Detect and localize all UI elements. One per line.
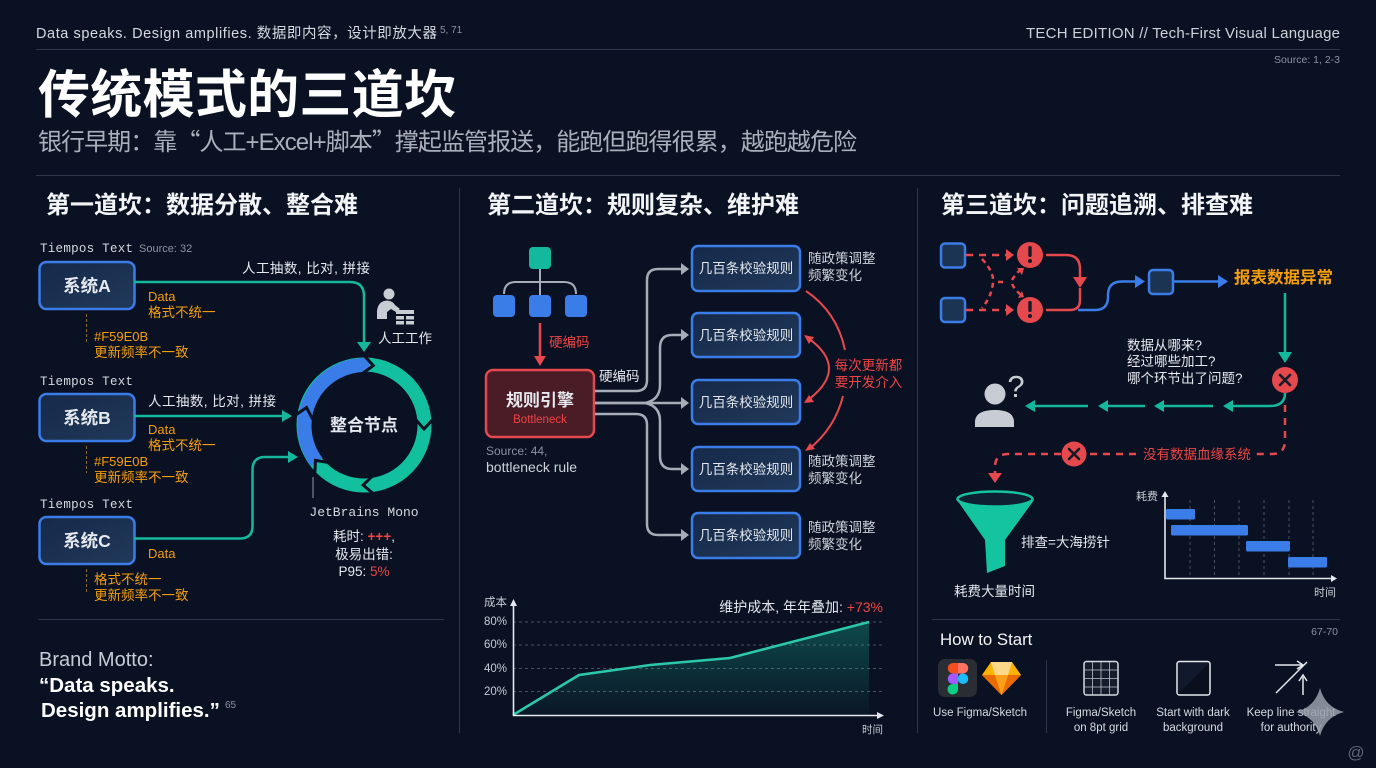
system A block: 格式不统一	[148, 305, 216, 320]
step: dark background: Start with dark	[1156, 707, 1230, 719]
heading: panel one: 第一道坎：数据分散、整合难	[46, 192, 358, 219]
rule box three: 几百条校验规则	[699, 394, 793, 410]
icon: manual work	[377, 288, 432, 346]
arrow: system B to integration node	[134, 393, 292, 422]
engine source note: Source: 44,	[486, 444, 547, 458]
system C block	[40, 498, 189, 603]
chart: maintenance cost area chart: 时间	[862, 723, 883, 736]
system B block	[40, 375, 216, 485]
rule box one	[692, 246, 876, 291]
heading: panel two: 第二道坎：规则复杂、维护难	[487, 192, 799, 219]
brand motto: “Data speaks.	[39, 674, 175, 697]
chart: time cost gantt	[1136, 490, 1337, 599]
heading: panel three: 第三道坎：问题追溯、排查难	[941, 192, 1253, 219]
rule box three	[692, 380, 800, 424]
icon: Figma	[938, 659, 977, 697]
title: 传统模式的三道坎	[38, 67, 456, 125]
chart: maintenance cost area chart: 80%	[484, 616, 507, 628]
red curved arrows: developer intervention	[804, 291, 903, 451]
step: 8pt grid	[1066, 662, 1136, 734]
rule box four: 随政策调整	[808, 453, 876, 469]
arrow: no data lineage path	[988, 405, 1285, 483]
system C block: Data	[148, 546, 176, 561]
system C block: 更新频率不一致	[94, 587, 189, 603]
system A block: Source: 32	[139, 243, 192, 255]
step: straight lines: for authority	[1261, 722, 1322, 734]
system C block: 系统C	[63, 531, 111, 551]
step: straight lines	[1247, 661, 1336, 734]
system C block: 格式不统一	[94, 572, 162, 587]
panel: how to start	[933, 626, 1338, 734]
icon: failure point	[1272, 367, 1298, 393]
panel: rule complexity	[484, 192, 903, 736]
arrow: no data lineage path: 没有数据血缘系统	[1143, 447, 1251, 462]
chart: maintenance cost area chart: 维护成本, 年年叠加: +73%	[719, 599, 883, 615]
step: 8pt grid: Figma/Sketch	[1066, 707, 1136, 719]
header strapline: Data speaks. Design amplifies. 数据即内容，设计即放大器	[36, 25, 438, 42]
header edition label	[1026, 25, 1340, 66]
chart: maintenance cost area chart	[484, 595, 884, 736]
chart: maintenance cost area chart: 成本	[484, 595, 507, 609]
chart: maintenance cost area chart: 20%	[484, 686, 507, 698]
icon: hierarchy tree	[493, 247, 587, 317]
engine source note	[486, 444, 577, 475]
connectors: engine to rules	[595, 263, 689, 541]
connectors: engine to rules: 硬编码	[599, 369, 640, 384]
rule box one: 随政策调整	[808, 250, 876, 266]
tangled data flow	[941, 242, 1228, 323]
icon: sparkle mark	[1296, 688, 1344, 736]
arrow: system A to integration node: 人工抽数, 比对, 拼接	[242, 260, 370, 276]
rule engine block: Bottleneck	[513, 414, 567, 426]
system B block: 更新频率不一致	[94, 469, 189, 485]
arrow: hard-coded into engine: 硬编码	[549, 335, 590, 350]
icon: manual work: 人工工作	[378, 331, 432, 346]
system C block: Tiempos Text	[40, 498, 133, 512]
arrow: anomaly to failure point	[1278, 293, 1292, 363]
rule box two: 几百条校验规则	[699, 327, 793, 343]
integration node ring	[295, 356, 433, 494]
icon: confused person: ?	[1007, 369, 1025, 404]
brand motto	[39, 649, 237, 722]
engine source note: bottleneck rule	[486, 459, 577, 475]
rule box one: 频繁变化	[808, 268, 862, 283]
brand motto: 65	[225, 700, 237, 711]
integration node cost note: JetBrains Mono	[309, 505, 419, 520]
icon: confused person	[975, 369, 1025, 427]
rule engine block	[486, 370, 594, 437]
questions text: 数据从哪来?	[1127, 338, 1202, 353]
integration node cost note	[309, 477, 419, 579]
step: 8pt grid: on 8pt grid	[1074, 722, 1128, 734]
reference number: 67-70	[1311, 626, 1338, 638]
questions text	[1127, 338, 1243, 386]
icon: Sketch	[982, 662, 1021, 695]
rule box five: 频繁变化	[808, 537, 862, 552]
system B block: Tiempos Text	[40, 375, 133, 389]
icon: funnel: 耗费大量时间	[954, 584, 1035, 599]
icon: funnel	[954, 492, 1110, 599]
system B block: #F59E0B	[94, 454, 148, 469]
arrow: hard-coded into engine	[534, 323, 590, 366]
chart: maintenance cost area chart: 60%	[484, 639, 507, 651]
header edition label: TECH EDITION // Tech-First Visual Language	[1026, 25, 1340, 42]
system A block: 更新频率不一致	[94, 344, 189, 360]
system B block: 系统B	[63, 408, 111, 428]
header edition label: Source: 1, 2-3	[1274, 54, 1340, 66]
rule engine block: 规则引擎	[506, 391, 574, 410]
arrow: system C to integration node	[134, 451, 298, 538]
rule box four: 频繁变化	[808, 471, 862, 486]
system A block: 系统A	[63, 276, 111, 296]
questions text: 哪个环节出了问题?	[1127, 371, 1243, 386]
chart: maintenance cost area chart: 40%	[484, 663, 507, 675]
chart: time cost gantt: 时间	[1314, 586, 1336, 599]
integration node cost note: 极易出错:	[335, 547, 393, 562]
icon: at sign: @	[1347, 743, 1365, 762]
rule box two	[692, 313, 800, 357]
system B block: Data	[148, 422, 176, 437]
subtitle: 银行早期：靠“人工+Excel+脚本”撑起监管报送，能跑但跑得很累，越跑越危险	[38, 122, 857, 157]
red curved arrows: developer intervention: 要开发介入	[835, 375, 903, 390]
integration node cost note: P95: 5%	[338, 564, 390, 579]
step: straight lines: Keep line straight	[1247, 707, 1336, 719]
rule box five: 随政策调整	[808, 519, 876, 535]
alert: report data anomaly: 报表数据异常	[1234, 268, 1333, 287]
rule box five: 几百条校验规则	[699, 527, 793, 543]
panel: root-cause tracing	[941, 192, 1337, 599]
arrow: trace back to person	[1025, 393, 1285, 412]
chart: time cost gantt: 耗费	[1136, 490, 1158, 503]
icon: funnel: 排查=大海捞针	[1021, 535, 1110, 550]
label: use Figma/Sketch: Use Figma/Sketch	[933, 707, 1027, 719]
system A block: #F59E0B	[94, 329, 148, 344]
step: dark background: background	[1163, 722, 1223, 734]
integration node cost note: 耗时: +++,	[333, 529, 395, 544]
arrow: system B to integration node: 人工抽数, 比对, 拼接	[148, 393, 276, 409]
brand motto: Brand Motto:	[39, 649, 154, 671]
questions text: 经过哪些加工?	[1127, 354, 1216, 369]
panel: data fragmentation	[39, 192, 433, 722]
arrow: system A to integration node	[134, 260, 371, 352]
rule box four: 几百条校验规则	[699, 461, 793, 477]
red curved arrows: developer intervention: 每次更新都	[835, 358, 902, 373]
rule box one: 几百条校验规则	[699, 260, 793, 276]
heading: how to start: How to Start	[940, 630, 1033, 649]
rule box five	[692, 513, 876, 558]
brand motto: Design amplifies.”	[41, 699, 220, 722]
rule box four	[692, 447, 876, 491]
system A block: Tiempos Text	[40, 242, 133, 256]
system A block: Data	[148, 289, 176, 304]
system A block	[40, 242, 216, 360]
integration node ring: 整合节点	[330, 415, 398, 435]
step: dark background	[1156, 662, 1230, 734]
system B block: 格式不统一	[148, 438, 216, 453]
header strapline: 5, 71	[440, 25, 463, 36]
